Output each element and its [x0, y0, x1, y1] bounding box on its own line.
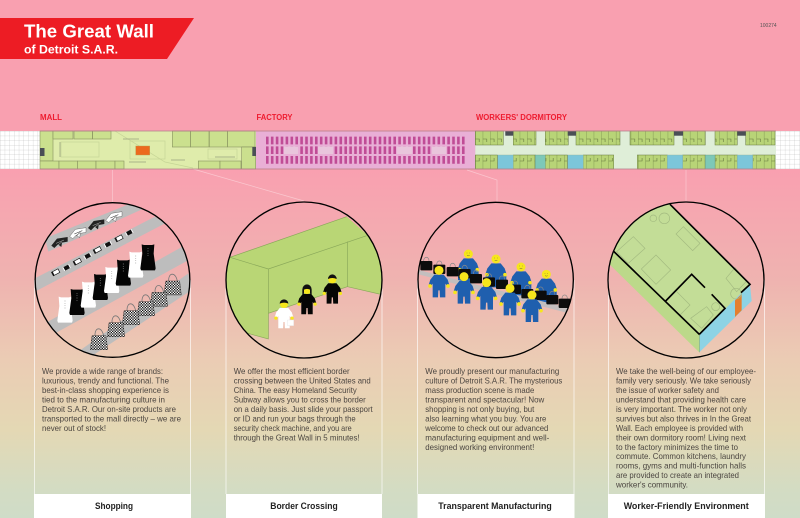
text block: worker-friendly environment: survives but also thrives in In the Great: [616, 414, 752, 423]
text block: shopping: transported to the mall directly – we are: [42, 414, 181, 423]
circle illustration: shopping goods on conveyor belts: [32, 202, 192, 358]
footer: transparent manufacturing: Transparent Manufacturing: [438, 501, 552, 511]
footer: border crossing: Border Crossing: [270, 501, 338, 511]
circle illustration: border crossing hall with figures: [217, 202, 387, 358]
panel: border crossing: [217, 202, 387, 518]
text block: shopping: [42, 367, 181, 433]
panel: worker-friendly environment: [597, 195, 765, 518]
plan: mall: [40, 131, 256, 169]
text block: transparent manufacturing: welcome to check out our advanced: [424, 424, 549, 433]
text block: border crossing: or ID and run your bags through the: [234, 414, 356, 423]
text block: worker-friendly environment: family very seriously. We take seriously: [616, 376, 752, 386]
text block: border crossing: We offer the most efficient border: [234, 367, 350, 376]
panel: transparent manufacturing: [418, 202, 574, 518]
text block: border crossing: China. The easy Homeland Security: [234, 386, 358, 395]
text block: shopping: best-in-class shopping experience is: [42, 386, 169, 395]
circle illustration: dormitory room section: [597, 195, 764, 358]
text block: transparent manufacturing: We proudly present our manufacturing: [425, 367, 560, 376]
footer: worker-friendly environment: [608, 494, 765, 518]
label: workers' dormitory: WORKERS' DORMITORY: [476, 113, 568, 122]
footer: shopping: [34, 494, 191, 518]
text block: worker-friendly environment: to the factory minimizes the time to: [616, 443, 738, 452]
text block: border crossing: security check machine, and you are: [234, 424, 352, 433]
text block: worker-friendly environment: worker's community.: [615, 481, 688, 490]
label: factory: FACTORY: [256, 113, 293, 122]
text block: transparent manufacturing: mass production scene is made: [425, 386, 535, 395]
plan: factory: [256, 132, 476, 168]
text block: worker-friendly environment: understand that providing health care: [616, 395, 746, 404]
text block: worker-friendly environment: their own dormitory room! Living next: [616, 433, 747, 442]
circle illustration: workers on assembly line: [418, 202, 573, 358]
text block: worker-friendly environment: rooms, gyms and multi-function halls: [616, 462, 746, 471]
text block: border crossing: [234, 367, 373, 442]
plan: right context grid: [776, 131, 800, 169]
plan: left context grid: [0, 131, 40, 169]
text block: transparent manufacturing: [424, 367, 562, 452]
footer: transparent manufacturing: [418, 494, 574, 518]
text block: worker-friendly environment: We take the well-being of our employee-: [616, 367, 756, 376]
text block: transparent manufacturing: also learning what you buy. You are: [425, 414, 547, 423]
plan: workers' dormitory: [475, 131, 776, 169]
text block: transparent manufacturing: designed working environment!: [425, 443, 534, 452]
text block: transparent manufacturing: manufacturing equipment and well-: [425, 433, 550, 442]
title banner: of Detroit S.A.R.: [24, 42, 118, 56]
text block: worker-friendly environment: are provided to create an integrated: [616, 471, 739, 480]
text block: shopping: luxurious, trendy and functional. The: [42, 376, 169, 386]
label: mall: MALL: [40, 113, 62, 122]
reference number: 100274: [760, 23, 777, 29]
text block: transparent manufacturing: shopping is not only buying, but: [425, 405, 535, 414]
text block: shopping: We provide a wide range of brands:: [42, 367, 163, 376]
text block: transparent manufacturing: culture of Detroit S.A.R. The mysterious: [425, 376, 562, 386]
text block: worker-friendly environment: commute. Common kitchens, laundry: [616, 452, 747, 461]
title banner: [0, 18, 194, 59]
text block: border crossing: through the Great Wall in 5 minutes!: [234, 433, 360, 442]
text block: border crossing: on a daily basis. Just slide your passport: [234, 405, 373, 414]
figure: black traveller: [323, 274, 342, 304]
text block: border crossing: crossing between the United States and: [234, 376, 371, 386]
connector lines from plan to circles: [112, 169, 686, 202]
panel frames: [34, 280, 764, 494]
footer: border crossing: [226, 494, 382, 518]
building plan strip: [0, 131, 800, 169]
text block: transparent manufacturing: transparent and spectacular! Now: [425, 395, 544, 404]
figure: black traveller with long hair: [297, 284, 317, 314]
text block: shopping: Detroit S.A.R. Our on-site products are: [42, 405, 176, 414]
text block: worker-friendly environment: Wall. Each employee is provided with: [616, 424, 743, 433]
figure: white shopper: [274, 299, 294, 328]
panel: shopping: [32, 202, 192, 518]
text block: worker-friendly environment: is very important. The worker not only: [616, 405, 748, 414]
text block: shopping: never out of stock!: [42, 424, 106, 433]
text block: worker-friendly environment: [615, 367, 756, 490]
text block: border crossing: Subway allows you to cross the border: [234, 395, 366, 404]
title banner: The Great Wall: [24, 20, 154, 42]
icon: mall atrium: [136, 146, 150, 155]
footer: shopping: Shopping: [95, 501, 133, 511]
text block: worker-friendly environment: the issue of worker safety and: [616, 386, 719, 395]
footer: worker-friendly environment: Worker-Friendly Environment: [624, 501, 749, 511]
text block: shopping: tied to the manufacturing culture in: [42, 395, 165, 404]
